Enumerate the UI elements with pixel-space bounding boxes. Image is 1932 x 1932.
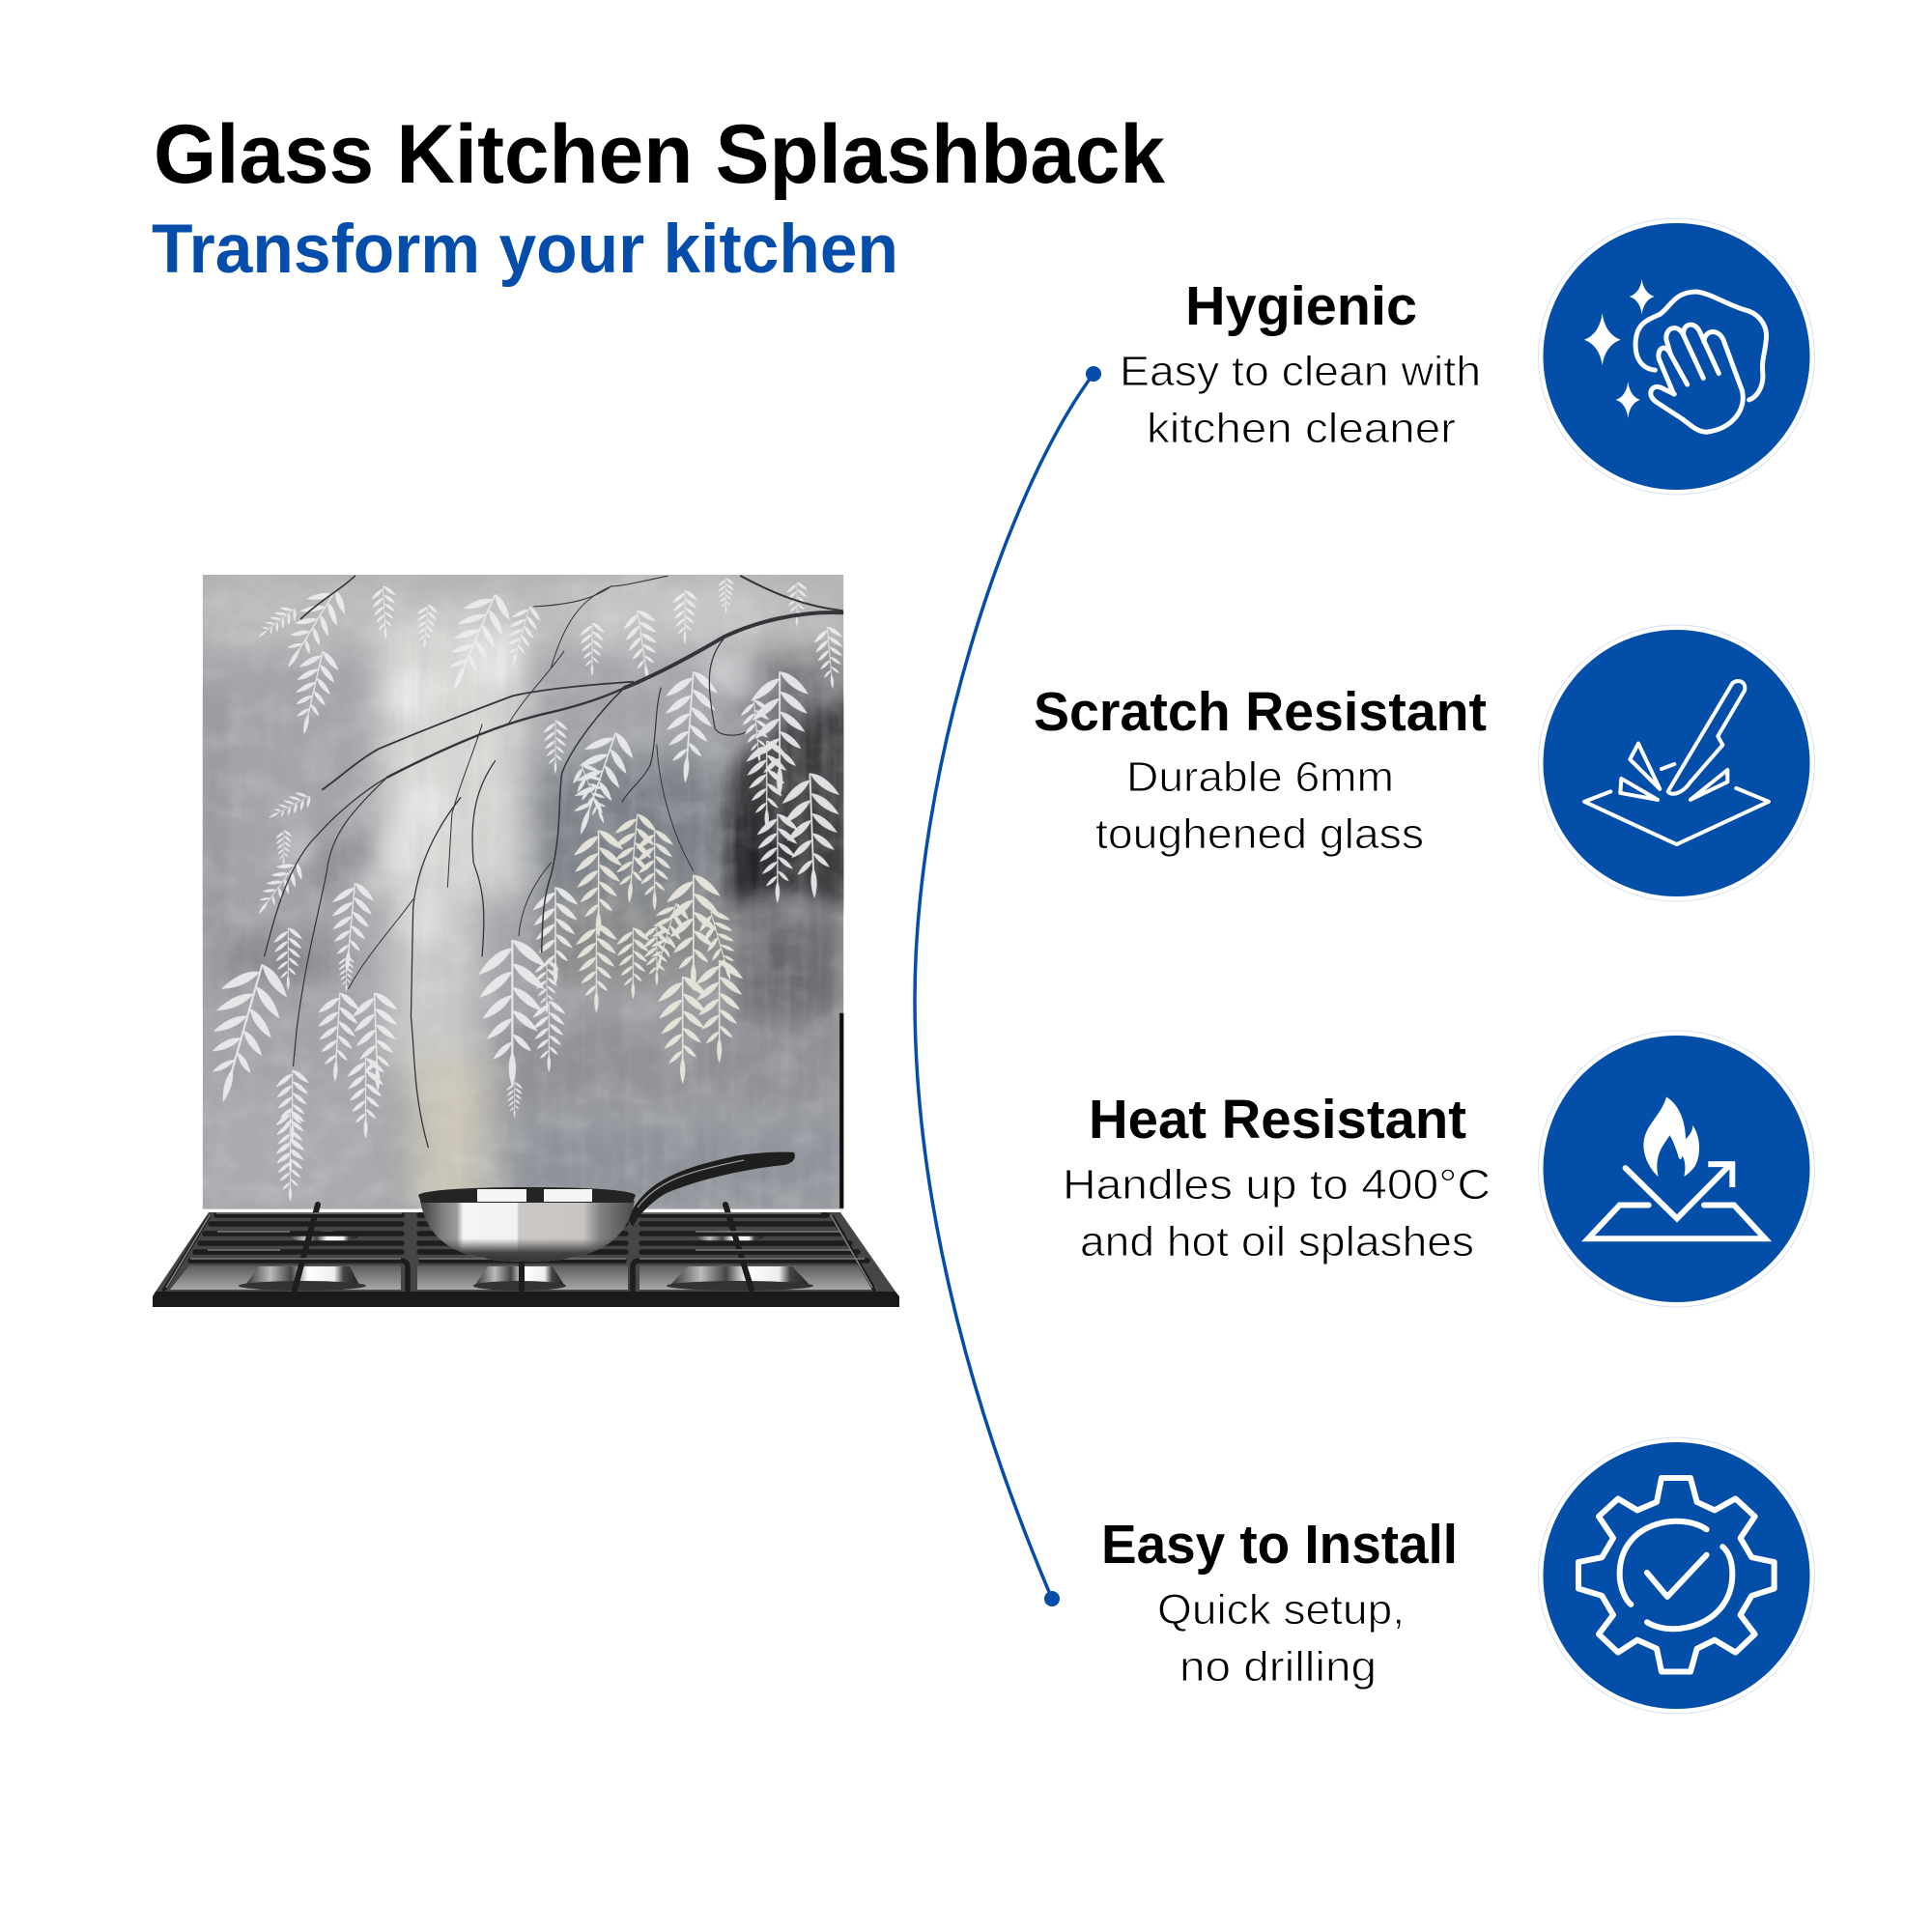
rear burners [289,1231,764,1242]
splashback painting [191,570,853,1212]
title: Glass Kitchen Splashback [154,108,1165,201]
gas stove [153,1152,899,1307]
feature: Heat Resistant text [1063,1089,1491,1265]
pan handle [628,1152,795,1227]
feature: Easy to Install text: no drilling [1179,1643,1377,1690]
icon: hand wiping with cloth and sparkles [1538,218,1814,495]
cream lower-right leaf sprays [574,812,747,1084]
feature: Hygienic text: kitchen cleaner [1147,405,1456,452]
frying pan [418,1152,795,1262]
feature: Heat Resistant text: Heat Resistant [1089,1089,1466,1151]
icon: flame with deflecting arrow [1538,1031,1814,1307]
pan rim [418,1187,636,1203]
front burners [239,1266,813,1291]
painted background [193,570,853,1212]
infographic canvas [153,122,1815,1714]
feature: Scratch Resistant text [1034,681,1487,858]
icon: gear with check mark [1538,1437,1814,1714]
feature: Scratch Resistant text: toughened glass [1095,810,1424,858]
grates [164,1205,874,1290]
feature: Scratch Resistant text: Durable 6mm [1126,753,1394,801]
grate highlights [166,1213,872,1288]
feature: Easy to Install text [1101,1514,1458,1690]
frosted light dabs [288,635,758,948]
feature: Hygienic text [1120,275,1481,452]
feature: Hygienic text: Hygienic [1185,275,1417,337]
connector curve with end dots [915,366,1101,1606]
stove front band [153,1292,899,1307]
pan body [420,1201,635,1262]
feature: Hygienic text: Easy to clean with [1120,348,1481,395]
black right edge [839,1013,843,1208]
willow branches [265,576,842,1148]
feature: Easy to Install text: Quick setup, [1157,1586,1405,1634]
feature: Scratch Resistant text: Scratch Resistant [1034,681,1487,743]
feature: Heat Resistant text: Handles up to 400°C [1063,1161,1491,1208]
willow leaf sprays [191,578,847,1202]
subtitle: Transform your kitchen [152,212,898,288]
product illustration: splashback panel with stove [153,570,899,1307]
stove top surface [156,1212,895,1292]
steel plate sections [170,1265,877,1290]
feature: Easy to Install text: Easy to Install [1101,1514,1458,1576]
icon: knife scratching glass [1538,625,1814,901]
feature: Heat Resistant text: and hot oil splashes [1080,1218,1474,1265]
